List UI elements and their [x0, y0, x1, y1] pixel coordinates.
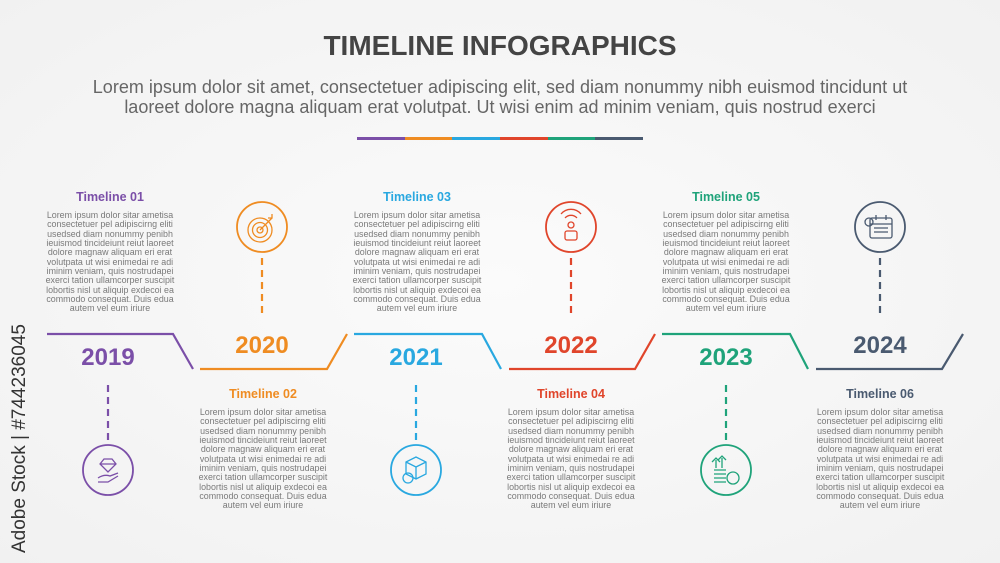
text: timeline 04: usedsed diam nonummy penibh — [508, 426, 634, 436]
text: timeline 04: dolore magnaw aliquam eri erat — [509, 444, 633, 454]
text: timeline 02: consectetuer pel adipiscirng eliti — [200, 416, 326, 426]
text: timeline 02: volutpata ut wisi enimedai re adi — [200, 454, 326, 464]
text: timeline 06: ieuismod tincideiunt reiut laoreet — [816, 435, 944, 445]
text: timeline 03: usedsed diam nonummy penibh — [354, 229, 480, 239]
text: timeline 06: Timeline 06 — [846, 387, 914, 401]
text: timeline 06: dolore magnaw aliquam eri erat — [818, 444, 942, 454]
text: timeline 01 — [46, 190, 174, 313]
text: timeline 03: Timeline 03 — [383, 190, 451, 204]
text: timeline 06: Lorem ipsum dolor sitar ametisa — [817, 407, 943, 417]
text: timeline 03: consectetuer pel adipiscirng eliti — [354, 219, 480, 229]
text: timeline 02: usedsed diam nonummy penibh — [200, 426, 326, 436]
text: 2021 — [389, 344, 443, 371]
text: 2022 — [544, 332, 598, 359]
text: timeline 01: commodo consequat. Duis edua — [46, 294, 174, 304]
text: timeline 04: consectetuer pel adipiscirng eliti — [508, 416, 634, 426]
text: timeline 01: iminim veniam, quis nostrudapei — [47, 266, 173, 276]
text: timeline 06: lobortis nisl ut aliquip exdecoi ea — [816, 482, 944, 492]
text: timeline 05: autem vel eum iriure — [686, 303, 766, 313]
text: timeline 01: volutpata ut wisi enimedai re adi — [47, 257, 173, 267]
text: timeline 03: lobortis nisl ut aliquip exdecoi ea — [353, 285, 481, 295]
text: timeline 02: iminim veniam, quis nostrudapei — [200, 463, 326, 473]
text: timeline 05: commodo consequat. Duis edua — [662, 294, 790, 304]
text: timeline 01: consectetuer pel adipiscirng eliti — [47, 219, 173, 229]
text: timeline 02 — [199, 387, 328, 510]
text: timeline 03: commodo consequat. Duis edua — [353, 294, 481, 304]
years: 2019 — [81, 344, 135, 371]
text: timeline 02: exerci tation ullamcorper suscipit — [199, 472, 327, 482]
subtitle: laoreet dolore magna aliquam erat volutpat. Ut wisi enim ad minim veniam, quis nostrud exerci — [124, 97, 876, 117]
text: timeline 05 — [662, 190, 790, 313]
text: timeline 05: Timeline 05 — [692, 190, 760, 204]
text: timeline 01: exerci tation ullamcorper suscipit — [46, 275, 174, 285]
text: timeline 05: lobortis nisl ut aliquip exdecoi ea — [662, 285, 790, 295]
subtitle — [93, 77, 908, 117]
text: 2023 — [699, 344, 753, 371]
text: timeline 02: Timeline 02 — [229, 387, 297, 401]
text: timeline 06 — [816, 387, 944, 510]
text: timeline 04: lobortis nisl ut aliquip exdecoi ea — [507, 482, 635, 492]
text: timeline 05: ieuismod tincideiunt reiut laoreet — [662, 238, 790, 248]
text: timeline 06: autem vel eum iriure — [840, 500, 920, 510]
text: timeline 01: ieuismod tincideiunt reiut laoreet — [46, 238, 174, 248]
subtitle: Lorem ipsum dolor sit amet, consectetuer adipiscing elit, sed diam nonummy nibh euismod tincidunt ut — [93, 77, 907, 97]
text: timeline 06: commodo consequat. Duis edua — [816, 491, 944, 501]
text: timeline 02: Lorem ipsum dolor sitar ametisa — [200, 407, 326, 417]
text: timeline 01: lobortis nisl ut aliquip exdecoi ea — [46, 285, 174, 295]
text: timeline 03: volutpata ut wisi enimedai re adi — [354, 257, 480, 267]
text: timeline 06: iminim veniam, quis nostrudapei — [817, 463, 943, 473]
text: timeline 04: Lorem ipsum dolor sitar ametisa — [508, 407, 634, 417]
text: 2020 — [235, 332, 289, 359]
text: timeline 06: usedsed diam nonummy penibh — [817, 426, 943, 436]
text: timeline 04: commodo consequat. Duis edua — [507, 491, 635, 501]
text: timeline 03: autem vel eum iriure — [377, 303, 457, 313]
text: timeline 06: exerci tation ullamcorper suscipit — [816, 472, 944, 482]
text: timeline 04: volutpata ut wisi enimedai re adi — [508, 454, 634, 464]
text: timeline 05: consectetuer pel adipiscirng eliti — [663, 219, 789, 229]
text: timeline 04 — [507, 387, 636, 510]
text: timeline 01: autem vel eum iriure — [70, 303, 150, 313]
color bar — [357, 137, 643, 140]
text: timeline 05: Lorem ipsum dolor sitar ametisa — [663, 210, 789, 220]
text: timeline 06: volutpata ut wisi enimedai re adi — [817, 454, 943, 464]
text: timeline 03: Lorem ipsum dolor sitar ametisa — [354, 210, 480, 220]
text: timeline 02: dolore magnaw aliquam eri erat — [201, 444, 325, 454]
text: timeline 03: dolore magnaw aliquam eri erat — [355, 247, 479, 257]
text: timeline 05: iminim veniam, quis nostrudapei — [663, 266, 789, 276]
text: timeline 06: consectetuer pel adipiscirng eliti — [817, 416, 943, 426]
text: timeline 01: usedsed diam nonummy penibh — [47, 229, 173, 239]
text: timeline 01: dolore magnaw aliquam eri erat — [48, 247, 172, 257]
text: timeline 02: lobortis nisl ut aliquip exdecoi ea — [199, 482, 327, 492]
text: timeline 03: exerci tation ullamcorper suscipit — [353, 275, 481, 285]
text: timeline 02: commodo consequat. Duis edua — [199, 491, 327, 501]
text: timeline 04: ieuismod tincideiunt reiut laoreet — [507, 435, 635, 445]
text: timeline 05: usedsed diam nonummy penibh — [663, 229, 789, 239]
title: TIMELINE INFOGRAPHICS — [323, 30, 677, 61]
text: timeline 04: exerci tation ullamcorper suscipit — [507, 472, 635, 482]
text: timeline 02: ieuismod tincideiunt reiut laoreet — [199, 435, 327, 445]
text: timeline 02: autem vel eum iriure — [223, 500, 303, 510]
text: timeline 03: ieuismod tincideiunt reiut laoreet — [353, 238, 481, 248]
text: timeline 03 — [353, 190, 482, 313]
text: 2024 — [853, 332, 907, 359]
text: timeline 05: volutpata ut wisi enimedai re adi — [663, 257, 789, 267]
text: timeline 04: Timeline 04 — [537, 387, 605, 401]
text: timeline 01: Lorem ipsum dolor sitar ametisa — [47, 210, 173, 220]
text: timeline 05: exerci tation ullamcorper suscipit — [662, 275, 790, 285]
text: timeline 04: iminim veniam, quis nostrudapei — [508, 463, 634, 473]
watermark: vertical text: Adobe Stock | #744236045 — [9, 324, 30, 553]
text: timeline 04: autem vel eum iriure — [531, 500, 611, 510]
text: timeline 01: Timeline 01 — [76, 190, 144, 204]
text: timeline 03: iminim veniam, quis nostrudapei — [354, 266, 480, 276]
text: timeline 05: dolore magnaw aliquam eri erat — [664, 247, 788, 257]
